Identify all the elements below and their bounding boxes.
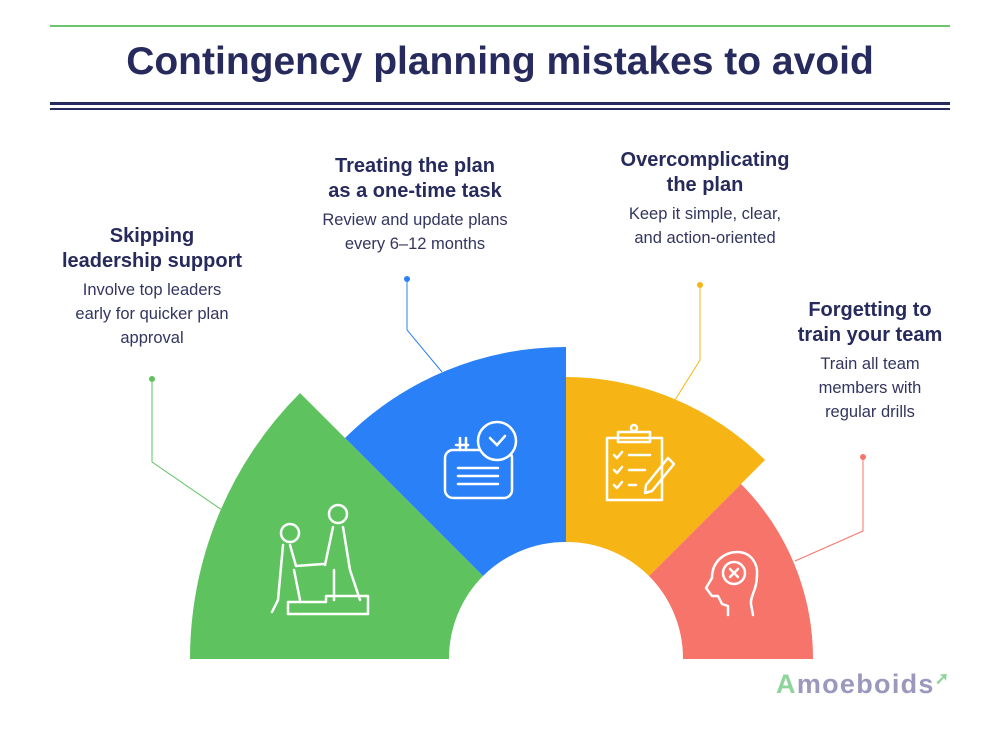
text: forgetting to train your team xyxy=(798,299,942,421)
text: skipping leadership support: Skipping xyxy=(110,225,194,247)
text: treating plan as one-time task: Treating the plan xyxy=(335,155,495,177)
text: overcomplicating the plan: Keep it simple, clear, and action-oriented xyxy=(629,205,781,247)
text: treating plan as one-time task xyxy=(322,155,508,253)
logo: Amoeboids: Amoeboids➚ xyxy=(776,669,950,699)
double navy rule xyxy=(50,102,950,110)
leader: yellow xyxy=(675,282,702,400)
leader: blue xyxy=(404,276,442,372)
text: forgetting to train your team: Train all team members with regular drills xyxy=(819,355,921,421)
icon: calendar with clock xyxy=(445,422,516,498)
text: skipping leadership support: Involve top leaders early for quicker plan approval xyxy=(75,281,229,347)
segment: red xyxy=(649,484,813,659)
text: skipping leadership support: leadership support xyxy=(62,250,242,272)
text: skipping leadership support xyxy=(62,225,242,347)
text: treating plan as one-time task: Review and update plans every 6–12 months xyxy=(322,211,508,253)
segment: blue xyxy=(345,347,566,576)
leader: red xyxy=(795,454,866,561)
text: treating plan as one-time task: as a one-time task xyxy=(328,180,502,202)
segment: yellow xyxy=(566,377,765,576)
icon: clipboard checklist xyxy=(607,425,674,500)
text: overcomplicating the plan xyxy=(621,149,789,247)
icon: head with x xyxy=(706,552,757,615)
segment: green xyxy=(190,393,483,659)
text: overcomplicating the plan: Overcomplicating xyxy=(621,149,789,171)
top green line xyxy=(50,25,950,27)
text: overcomplicating the plan: the plan xyxy=(667,174,743,196)
leader: green xyxy=(150,376,222,510)
text: forgetting to train your team: Forgetting to xyxy=(808,299,932,321)
title: Contingency planning mistakes to avoid xyxy=(126,40,874,83)
text: forgetting to train your team: train your team xyxy=(798,324,942,346)
icon: people climbing steps xyxy=(272,505,368,614)
